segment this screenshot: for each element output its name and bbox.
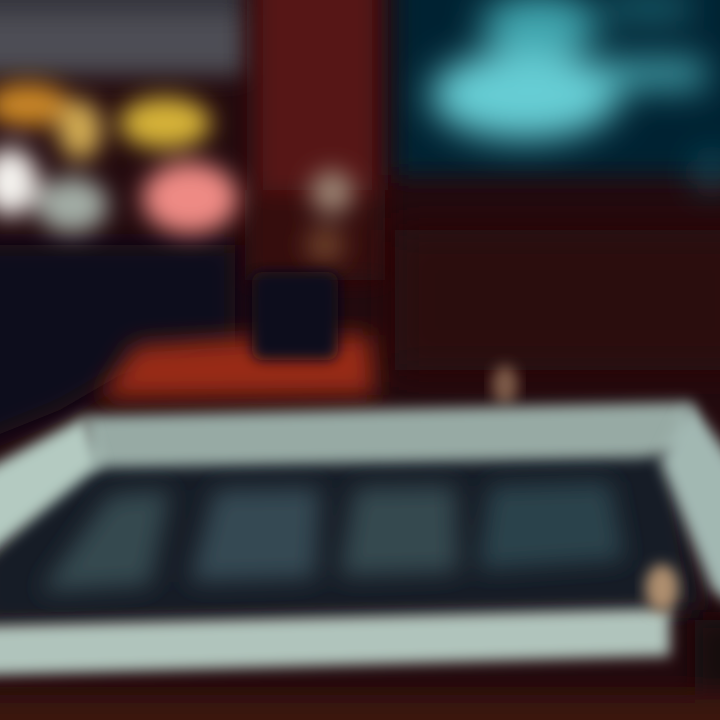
panel: bottom dark foreground [0,620,720,720]
panel: orange-red table shape [100,335,375,398]
tablet screen base [0,440,700,625]
icon: fingertip on tablet [645,564,679,612]
panel: dark navy counter [0,245,235,450]
panel: coloured lights [0,83,354,263]
icon: finger tip [492,365,518,405]
tablet right frame wedge [660,402,720,610]
panel: teal monitor [395,0,720,188]
tablet bottom frame band [0,608,670,676]
panel: red-brown column [245,0,385,280]
panel: dark red wall [395,230,720,370]
tablet left frame wedge [0,416,100,570]
panel: tablet [0,402,720,676]
tablet screen panels [40,482,625,592]
icon: black cup [252,272,338,360]
tablet top frame band [85,402,700,468]
icon: cyan glow on monitor [430,0,720,188]
panel: grey upper-left backdrop [0,0,245,75]
